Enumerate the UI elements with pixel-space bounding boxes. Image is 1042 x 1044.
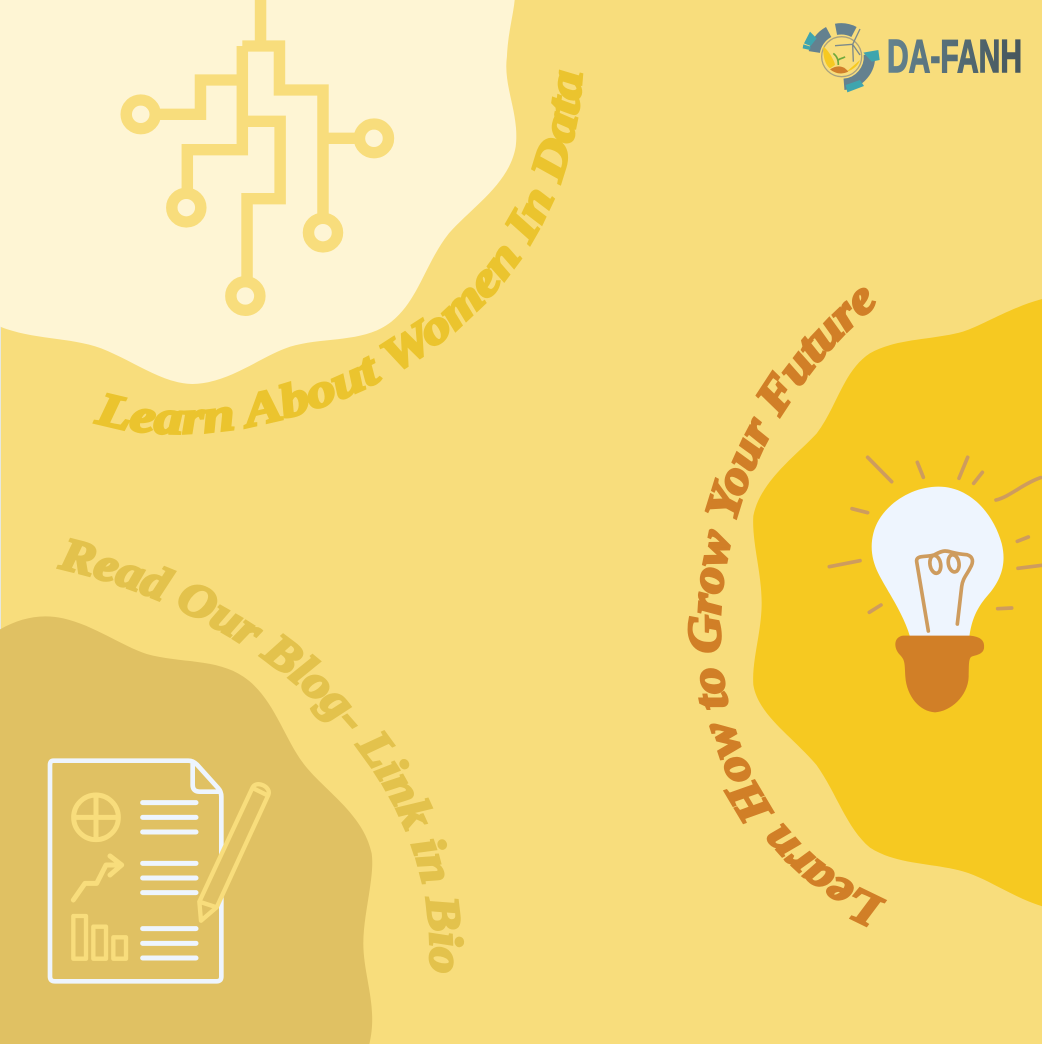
heading: Learn About Women In Data: Learn About Women In Data	[92, 70, 584, 436]
trend arrow	[73, 856, 122, 900]
logo emblem	[803, 29, 880, 92]
filament	[917, 551, 972, 631]
document outline	[50, 761, 221, 981]
globe icon	[74, 795, 118, 840]
panel: top-left pale blob	[0, 0, 516, 384]
heading: Learn How to Grow Your Future: Learn How to Grow Your Future	[688, 288, 888, 928]
pencil	[199, 784, 269, 921]
text lines	[143, 803, 196, 958]
heading: Read Our Blog- Link in Bio: Read Our Blog- Link in Bio	[56, 538, 464, 973]
light rays	[829, 457, 1042, 612]
left edge line	[0, 0, 1, 1044]
panel: right yellow blob	[753, 299, 1042, 906]
bar chart	[73, 916, 126, 959]
icon: circuit	[126, 0, 388, 310]
icon: document with charts and pencil	[50, 761, 269, 981]
logo: DA-FANH	[803, 29, 1022, 92]
bulb glass	[872, 487, 1004, 637]
icon: light bulb	[829, 457, 1042, 712]
bulb base	[895, 636, 984, 712]
panel: bottom-left blob	[0, 616, 372, 1044]
